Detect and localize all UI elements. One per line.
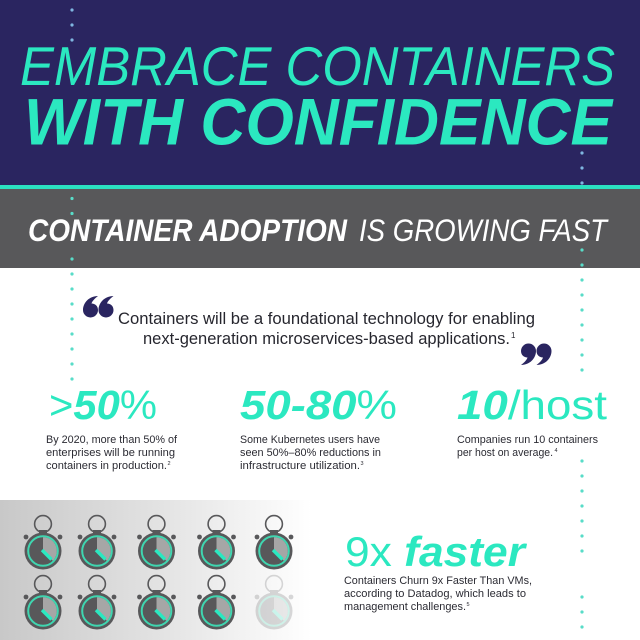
stat: 10/host: 10/host: [457, 382, 608, 428]
stat description 1: containers in production.: [46, 460, 167, 472]
dotted line: left: [70, 8, 74, 381]
stat description 4: according to Datadog, which leads to: [344, 588, 526, 600]
stat description 3: Companies run 10 containers: [457, 434, 598, 446]
stat description 4: [344, 575, 532, 613]
stat description 2: [240, 434, 381, 472]
stopwatch grid: [24, 516, 293, 630]
subtitle: CONTAINER ADOPTION: [28, 212, 348, 248]
stat: >50%: [46, 382, 177, 472]
subtitle: IS GROWING FAST: [359, 212, 609, 248]
stat description 4: management challenges.: [344, 601, 466, 613]
subtitle: [28, 212, 609, 248]
stat description 2: 3: [360, 461, 364, 467]
stat description 1: enterprises will be running: [46, 447, 175, 459]
stat: 9x faster: 9x faster: [345, 528, 528, 575]
stat description 1: By 2020, more than 50% of: [46, 434, 177, 446]
quote text: 1: [511, 331, 516, 340]
stat: >50%: >50%: [49, 382, 157, 428]
panel: title banner: [0, 0, 640, 185]
teal divider band: [0, 185, 640, 189]
icon: closing quote mark: [521, 343, 552, 365]
stat description 1: 2: [168, 461, 171, 467]
stat description 2: infrastructure utilization.: [240, 460, 360, 472]
dotted line: right: [580, 151, 584, 629]
stat description 3: per host on average.: [457, 447, 553, 459]
title line 2: WITH CONFIDENCE: [24, 84, 614, 158]
stat description 1: [46, 434, 177, 472]
stat description 3: 4: [554, 448, 558, 454]
stat description 3: [457, 434, 598, 459]
icon: opening quote mark: [83, 296, 114, 318]
stat description 4: Containers Churn 9x Faster Than VMs,: [344, 575, 532, 587]
quote text: [118, 310, 535, 348]
stat: 10/host: [457, 382, 608, 459]
stat: 50-80%: [240, 382, 397, 472]
panel: stopwatch background: [0, 500, 312, 640]
panel: subtitle band: [0, 189, 640, 268]
stat description 4: 5: [466, 602, 470, 608]
quote text: next-generation microservices-based applications.: [143, 330, 510, 348]
quote text: Containers will be a foundational technology for enabling: [118, 310, 535, 328]
stat description 2: Some Kubernetes users have: [240, 434, 380, 446]
stat description 2: seen 50%–80% reductions in: [240, 447, 381, 459]
stat: 9x faster: [344, 528, 532, 613]
stat: 50-80%: 50-80 %: [240, 382, 397, 428]
